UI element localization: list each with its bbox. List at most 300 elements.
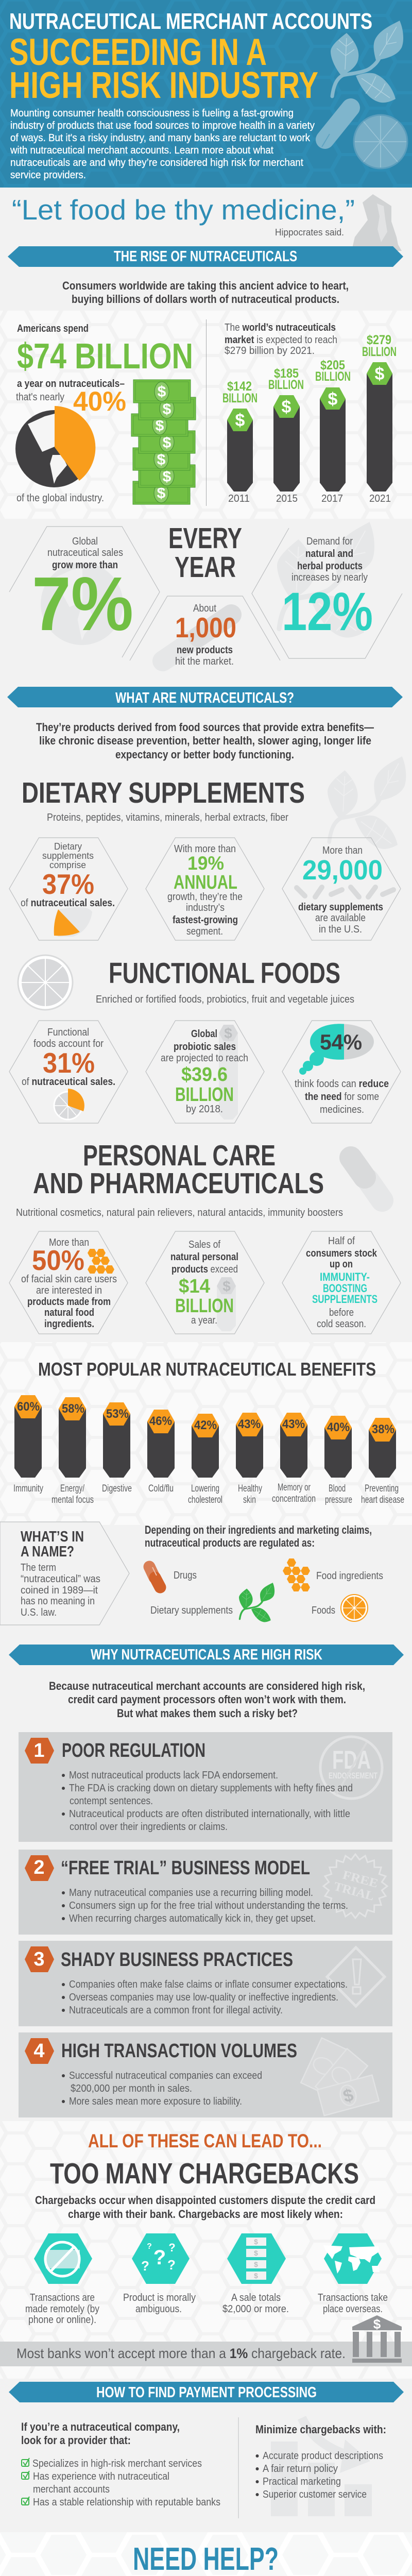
panel: market growth chart	[222, 322, 397, 504]
heading: high transaction volumes: HIGH TRANSACTION VOLUMES	[61, 2040, 297, 2062]
heading: every year: EVERY	[168, 522, 242, 555]
bar chart: benefits: Immunity	[13, 1483, 43, 1494]
label: food ingredients: Food ingredients	[316, 1570, 383, 1582]
stat: demand 12%: increases by nearly	[291, 572, 368, 583]
icon: question marks hexagon: ?	[153, 2246, 166, 2269]
list: free trial bullets: Many nutraceutical companies use a recurring billing model.	[69, 1887, 313, 1899]
bar chart: benefits: 53%	[106, 1407, 129, 1421]
callout: 1% chargeback rate	[0, 2315, 412, 2366]
badge: 2	[25, 1855, 54, 1881]
icon: plant watermark	[277, 522, 374, 638]
list: free trial bullets	[62, 1887, 348, 1924]
card: 31% of sales	[9, 1021, 128, 1123]
badge: 1: 1	[33, 1740, 45, 1761]
card: probiotic sales: are projected to reach	[161, 1053, 248, 1064]
card: 19% annual growth: 19%	[187, 853, 224, 874]
icon: bar watermark: $	[222, 1278, 231, 1294]
icon: pills	[297, 887, 393, 897]
panel: 4 high transaction volumes	[19, 2032, 392, 2117]
icon: honeycomb	[283, 1558, 310, 1591]
card: $14 billion sales: a year.	[191, 1315, 217, 1326]
card: 29,000 supplements	[282, 838, 401, 940]
icon: bank: $	[373, 2316, 381, 2332]
banner: the rise of nutraceuticals: THE RISE OF NUTRACEUTICALS	[114, 248, 297, 265]
bar chart: benefits: pressure	[325, 1495, 352, 1505]
icon: money stack: $	[163, 468, 171, 485]
bar chart: benefits	[13, 1395, 404, 1505]
icon: bank	[352, 2315, 402, 2363]
list: shady practices bullets	[62, 1979, 348, 2016]
card: 19% annual growth	[146, 838, 264, 940]
intro text: Mounting consumer health consciousness is fueling a fast-growing	[10, 108, 294, 119]
icon: money stack: $	[158, 383, 166, 400]
icon: bar watermark	[217, 1277, 236, 1331]
card: probiotic sales: $39.6	[181, 1064, 228, 1086]
labels: chargeback conditions: Product is morally	[123, 2292, 196, 2303]
bar chart: market size: $205	[320, 358, 345, 372]
bar chart: benefits: concentration	[272, 1494, 316, 1504]
bar chart: benefits: skin	[243, 1495, 256, 1505]
list: free trial bullets: When recurring charges automatically kick in, they get upset.	[69, 1913, 316, 1924]
panel: 1 poor regulation	[19, 1732, 392, 1842]
card: 31% of sales: of nutraceutical sales.	[22, 1076, 115, 1088]
text: definition	[36, 721, 374, 761]
icon: bar watermark: $	[224, 1025, 232, 1041]
list: provider checklist: Specializes in high-risk merchant services	[32, 2458, 202, 2469]
icon: thought bubble chart	[299, 1024, 374, 1075]
title	[9, 9, 372, 106]
label: drugs: Drugs	[174, 1570, 197, 1581]
card: immunity-boosting supplements: consumers stock	[306, 1248, 377, 1259]
banner: why nutraceuticals are high risk: WHY NUTRACEUTICALS ARE HIGH RISK	[91, 1647, 322, 1663]
list: minimize chargebacks bullets	[255, 2450, 383, 2500]
subheading: examples: Nutritional cosmetics, natural pain relievers, natural antacids, immunity boosters	[16, 1207, 343, 1218]
bar chart: market size: $142	[227, 379, 252, 394]
subheading: examples: Enriched or fortified foods, probiotics, fruit and vegetable juices	[96, 994, 354, 1005]
stat: demand 12%: Demand for	[306, 536, 353, 547]
list: provider checklist: merchant accounts	[33, 2484, 110, 2495]
card: 29,000 supplements: dietary supplements	[298, 902, 383, 913]
list: minimize chargebacks bullets: A fair return policy	[263, 2463, 338, 2475]
icon: money stack: $	[163, 434, 171, 451]
bar chart: market size: BILLION	[315, 369, 351, 384]
intro: consumers worldwide: buying billions of dollars worth of nutraceutical products.	[72, 293, 339, 306]
intro: consumers worldwide: Consumers worldwide are taking this ancient advice to heart,	[62, 279, 349, 292]
banner: what are nutraceuticals	[7, 687, 403, 707]
badge: 1	[25, 1738, 54, 1764]
bar chart: benefits: 46%	[149, 1414, 172, 1428]
callout: 1% chargeback rate: Most banks won’t accept more than a 1% chargeback rate.	[16, 2346, 346, 2361]
callout: what's in a name: WHAT’S IN	[21, 1529, 84, 1545]
icon: no FDA endorsement: ENDORSEMENT	[329, 1771, 377, 1781]
icon: drug capsule	[149, 1567, 160, 1587]
subheading: examples: Proteins, peptides, vitamins, minerals, herbal extracts, fiber	[47, 812, 288, 823]
panel: look for a provider	[21, 2420, 220, 2508]
icon: orange slice	[354, 115, 407, 168]
card: 50% facial care: natural food	[44, 1307, 94, 1318]
stat: 40%: 40%	[73, 386, 126, 417]
card: 50% facial care: products made from	[27, 1296, 111, 1308]
card: $14 billion sales: $14	[179, 1276, 210, 1297]
list: shady practices bullets: Nutraceuticals are a common front for illegal activity.	[69, 2005, 283, 2016]
heading: shady business practices: SHADY BUSINESS PRACTICES	[61, 1949, 293, 1971]
bar chart: market size: 2015	[276, 493, 298, 504]
label: foods: Foods	[312, 1605, 335, 1616]
labels: chargeback conditions	[25, 2292, 388, 2326]
card: $14 billion sales	[146, 1231, 264, 1334]
card: probiotic sales: probiotic sales	[174, 1041, 236, 1053]
heading: dietary supplements: DIETARY SUPPLEMENTS	[22, 776, 305, 809]
heading: provider	[21, 2420, 180, 2447]
card: 50% facial care	[9, 1231, 128, 1334]
card: immunity-boosting supplements: up on	[330, 1259, 353, 1270]
card: immunity-boosting supplements: BOOSTING	[323, 1282, 367, 1295]
card: 29,000 supplements: More than	[322, 845, 363, 856]
icon: no FDA endorsement	[320, 1737, 382, 1799]
stat: demand 12%	[282, 536, 373, 642]
banner: how to find payment processing	[9, 2382, 404, 2402]
bar chart: benefits: Healthy	[238, 1483, 262, 1494]
icon: bills hexagon	[227, 2233, 286, 2284]
icon: money stack: $	[157, 451, 166, 468]
badge: 4	[25, 2038, 54, 2064]
card: probiotic sales: by 2018.	[186, 1104, 223, 1115]
heading: provider: If you’re a nutraceutical company,	[21, 2420, 180, 2433]
icon: no FDA endorsement: FDA	[332, 1745, 371, 1774]
heading: every year: YEAR	[175, 551, 236, 584]
card: immunity-boosting supplements: before	[329, 1307, 354, 1318]
text: market forecast: market is expected to reach	[225, 334, 337, 346]
icon: capsule watermark	[163, 615, 231, 661]
list: minimize chargebacks bullets: Accurate product descriptions	[263, 2450, 383, 2462]
icon: orange slice	[341, 1595, 368, 1621]
panel: 2 free trial business model	[19, 1850, 392, 1935]
bar chart: market size: 2021	[369, 493, 391, 504]
title: SUCCEEDING IN A	[9, 31, 267, 73]
label: dietary supplements: Dietary supplements	[150, 1605, 233, 1616]
quote: Hippocrates said.	[275, 227, 344, 238]
stat: sales grow 7%: Global	[72, 536, 98, 547]
list: transaction volume bullets: More sales mean more exposure to liability.	[69, 2096, 242, 2107]
icon: free trial starburst: FREE	[341, 1868, 380, 1891]
bar chart: benefits: 58%	[62, 1402, 84, 1416]
list: poor regulation bullets: The FDA is cracking down on dietary supplements with hefty fines and	[69, 1783, 353, 1794]
list: transaction volume bullets: Successful nutraceutical companies can exceed	[69, 2070, 262, 2081]
card: $14 billion sales: products exceed	[171, 1264, 238, 1275]
icon: green plant	[239, 1583, 274, 1622]
list: minimize chargebacks bullets: Superior customer service	[263, 2489, 367, 2500]
card: $14 billion sales: Sales of	[188, 1239, 220, 1250]
card: $14 billion sales: BILLION	[175, 1295, 234, 1317]
bar chart: market size: $185	[274, 366, 299, 381]
stat: demand 12%: 12%	[282, 582, 373, 642]
card: 29,000 supplements: 29,000	[302, 855, 383, 886]
bar chart: market size: $	[235, 411, 245, 430]
card: 37% of sales: Dietary	[54, 841, 82, 852]
bar chart: benefits: Blood	[329, 1483, 346, 1494]
bar chart: benefits: 40%	[327, 1420, 350, 1434]
card: 50% facial care: are interested in	[36, 1285, 102, 1296]
labels: chargeback conditions: phone or online).	[28, 2314, 96, 2326]
icon: capsule watermark	[351, 1158, 382, 1200]
intro text: of ways. But it's a risky industry, and many banks are reluctant to work	[10, 132, 311, 144]
panel: minimize chargebacks	[255, 2418, 386, 2516]
heading: need help: NEED HELP?	[133, 2541, 279, 2576]
text: market forecast: $279 billion by 2021.	[225, 345, 315, 357]
banner: the rise of nutraceuticals	[8, 246, 403, 267]
icon: question marks hexagon	[132, 2233, 190, 2284]
card: 19% annual growth: fastest-growing	[173, 914, 238, 926]
stat: 1,000 new products: hit the market.	[175, 656, 234, 667]
bar chart: market size: BILLION	[268, 378, 304, 392]
bar chart: benefits: Preventing	[365, 1483, 399, 1494]
icon: orange slice watermark	[18, 955, 73, 1010]
bar chart: benefits: Lowering	[191, 1483, 219, 1494]
card: 54% think foods: the need for some	[305, 1091, 379, 1103]
bar chart: market size: $	[328, 389, 338, 409]
card: probiotic sales	[146, 1021, 264, 1123]
banner: what are nutraceuticals: WHAT ARE NUTRACEUTICALS?	[115, 690, 294, 706]
text: market forecast: The world’s nutraceuticals	[225, 322, 336, 333]
text: high risk intro: credit card payment processors often won’t work with them.	[68, 1693, 346, 1706]
stat: 1,000 new products: 1,000	[175, 612, 236, 643]
card: 37% of sales: supplements	[42, 851, 94, 861]
icon: thought bubble chart: 54%	[320, 1030, 362, 1054]
icon: Hippocrates bust	[353, 194, 402, 251]
panel: dietary supplements	[9, 756, 406, 940]
banner: why nutraceuticals are high risk	[9, 1645, 404, 1665]
icon: bills hexagon: $	[254, 2249, 258, 2257]
intro text: industry of products that use food sources to improve health in a variety	[10, 120, 315, 131]
list: minimize chargebacks bullets: Practical marketing	[263, 2476, 341, 2487]
stat: 1,000 new products	[175, 603, 236, 667]
list: provider checklist: Has experience with nutraceutical	[33, 2471, 169, 2482]
card: 31% of sales: Functional	[47, 1027, 89, 1038]
card: $14 billion sales: natural personal	[170, 1251, 238, 1263]
card: 54% think foods: think foods can reduce	[295, 1078, 389, 1090]
icon: warning diamond	[327, 1947, 385, 2006]
icon: question marks hexagon: ?	[141, 2258, 149, 2274]
text: high risk intro: Because nutraceutical merchant accounts are considered high risk,	[49, 1680, 365, 1692]
icon: globe watermark	[41, 563, 123, 645]
icon: money stack: $	[157, 485, 166, 502]
text: regulated intro	[145, 1523, 372, 1549]
card: 29,000 supplements: are available	[315, 912, 366, 924]
heading: personal care and pharmaceuticals	[33, 1139, 324, 1200]
text: americans spend: Americans spend	[17, 323, 89, 334]
card: probiotic sales: BILLION	[175, 1084, 234, 1106]
bar chart: benefits: Cold/flu	[148, 1483, 174, 1494]
heading: all of these can lead to: ALL OF THESE CAN LEAD TO...	[88, 2130, 322, 2151]
card: immunity-boosting supplements	[282, 1231, 401, 1334]
icon: world map hexagon	[323, 2233, 382, 2284]
panel: regulated as	[145, 1523, 383, 1622]
card: 31% of sales: foods account for	[33, 1038, 104, 1049]
bar chart: market size: 2017	[321, 493, 343, 504]
card: 54% think foods	[282, 1021, 401, 1123]
heading: minimize chargebacks: Minimize chargebacks with:	[255, 2423, 386, 2436]
bar chart: benefits: Energy/	[60, 1483, 85, 1494]
text: high risk intro: But what makes them such a risky bet?	[117, 1707, 298, 1720]
bar chart: benefits: 43%	[238, 1417, 261, 1431]
bar chart: benefits: 42%	[194, 1418, 217, 1432]
callout: what's in a name: The term	[21, 1562, 56, 1573]
icon: money stack: $	[163, 401, 171, 418]
bar chart: benefits: 43%	[282, 1417, 305, 1431]
icon: globe pie 40%	[15, 406, 95, 487]
intro text	[10, 108, 315, 181]
bar chart: market size: 2011	[228, 493, 250, 504]
stat: sales grow 7%: 7%	[32, 562, 133, 647]
stat: $74 billion: $74 BILLION	[17, 336, 193, 376]
icon: free trial starburst: TRIAL	[332, 1880, 375, 1904]
stat: sales grow 7%: grow more than	[52, 560, 118, 571]
bar chart: market size: $279	[367, 333, 391, 347]
text: of the global industry: of the global industry.	[16, 493, 104, 504]
intro: consumers worldwide	[62, 279, 349, 306]
labels: chargeback conditions: Transactions take	[318, 2292, 388, 2303]
callout: what's in a name: coined in 1989—it	[21, 1585, 98, 1596]
icon: bills hexagon: $	[254, 2260, 258, 2268]
icon: question marks hexagon: ?	[168, 2241, 176, 2254]
icon: orange pie 31%	[54, 1089, 84, 1120]
card: 29,000 supplements: in the U.S.	[319, 924, 362, 935]
labels: chargeback conditions: made remotely (by	[25, 2303, 99, 2315]
card: 19% annual growth: industry’s	[186, 902, 225, 913]
panel: $74 billion spend	[15, 323, 196, 504]
card: 50% facial care: of facial skin care users	[21, 1274, 117, 1285]
callout: what's in a name: has no meaning in	[21, 1596, 95, 1607]
icon: capsule	[322, 108, 351, 147]
badge: 4: 4	[33, 2040, 45, 2062]
card: 50% facial care: 50%	[32, 1244, 84, 1276]
callout: what's in a name	[0, 1522, 129, 1625]
icon: declining bars watermark	[271, 2418, 372, 2516]
icon: bills hexagon: $	[254, 2238, 258, 2246]
heading: every year	[168, 522, 242, 584]
list: poor regulation bullets: contempt sentences.	[70, 1795, 153, 1807]
card: 50% facial care: More than	[49, 1237, 89, 1248]
heading: personal care and pharmaceuticals: AND PHARMACEUTICALS	[33, 1167, 324, 1200]
list: poor regulation bullets: control over their ingredients or claims.	[70, 1821, 228, 1833]
bar chart: benefits: mental focus	[52, 1495, 94, 1505]
panel: too many chargebacks	[25, 2130, 388, 2326]
icon: bills hexagon: $	[254, 2272, 258, 2280]
card: 19% annual growth: segment.	[186, 926, 223, 937]
icon: no card hexagon	[34, 2233, 92, 2284]
callout: what's in a name: U.S. law.	[21, 1607, 57, 1618]
list: poor regulation bullets: Most nutraceutical products lack FDA endorsement.	[69, 1770, 278, 1781]
text: chargebacks explanation: charge with their bank. Chargebacks are most likely when:	[68, 2208, 343, 2221]
badge: 3	[25, 1946, 54, 1972]
text: high risk intro	[49, 1680, 365, 1720]
quote: “Let food be thy medicine,”	[12, 194, 355, 226]
heading: personal care and pharmaceuticals: PERSONAL CARE	[83, 1139, 276, 1172]
card: 54% think foods: medicines.	[320, 1104, 364, 1115]
icon: question marks hexagon: ?	[147, 2242, 152, 2251]
labels: chargeback conditions: place overseas.	[323, 2303, 383, 2315]
list: poor regulation bullets	[62, 1770, 353, 1833]
bar chart: benefits: cholesterol	[188, 1495, 222, 1505]
text: chargebacks explanation	[35, 2194, 375, 2221]
banner: how to find payment processing: HOW TO FIND PAYMENT PROCESSING	[96, 2384, 317, 2401]
icon: money stack: $	[156, 417, 164, 434]
card: probiotic sales: Global	[191, 1028, 217, 1040]
panel: header	[0, 0, 412, 188]
callout: what's in a name: A NAME?	[21, 1544, 74, 1560]
list: provider checklist	[22, 2458, 220, 2508]
labels: chargeback conditions: A sale totals	[231, 2292, 281, 2303]
list: free trial bullets: Consumers sign up for the free trial without understanding the terms.	[69, 1900, 348, 1911]
bar chart: market size: $	[282, 397, 291, 417]
labels: chargeback conditions: ambiguous.	[135, 2303, 182, 2315]
panel: functional foods	[9, 955, 401, 1123]
text: market forecast	[225, 322, 337, 357]
card: immunity-boosting supplements: cold season.	[317, 1318, 366, 1330]
list: transaction volume bullets	[62, 2070, 262, 2107]
text: that's nearly: that's nearly	[16, 392, 64, 403]
badge: 2: 2	[33, 1857, 45, 1878]
icon: plant watermark	[328, 756, 406, 849]
heading: poor regulation: POOR REGULATION	[62, 1740, 205, 1761]
card: 37% of sales	[9, 838, 128, 940]
card: 19% annual growth: growth, they’re the	[167, 891, 243, 903]
list: shady practices bullets: Companies often make false claims or inflate consumer expectations.	[69, 1979, 348, 1990]
card: 37% of sales: of nutraceutical sales.	[21, 897, 115, 909]
card: immunity-boosting supplements: IMMUNITY-	[320, 1270, 370, 1283]
text: definition: like chronic disease prevention, better health, slower aging, longer life	[39, 734, 371, 747]
intro text: with nutraceutical merchant accounts. Learn more about what	[10, 145, 273, 156]
bar chart: market size: $	[375, 364, 385, 384]
stat: 1,000 new products: new products	[177, 645, 233, 656]
stat: demand 12%: natural and	[305, 548, 353, 560]
badge: 3: 3	[33, 1948, 45, 1970]
bar chart: benefits: 60%	[17, 1400, 40, 1414]
card: 19% annual growth: With more than	[174, 843, 236, 855]
icon: bar watermark	[219, 1025, 238, 1120]
bar chart: benefits: Digestive	[102, 1483, 132, 1494]
text: a year on nutraceuticals: a year on nutraceuticals–	[17, 378, 125, 389]
list: poor regulation bullets: Nutraceutical products are often distributed internationally, with little	[69, 1808, 350, 1820]
heading: functional foods: FUNCTIONAL FOODS	[109, 957, 340, 990]
panel: every year stats	[9, 522, 402, 667]
panel: most popular benefits	[13, 1359, 404, 1505]
list: transaction volume bullets: $200,000 per month in sales.	[71, 2083, 192, 2094]
card: 31% of sales: 31%	[43, 1047, 95, 1079]
icon: honeycomb	[88, 1249, 114, 1274]
panel: 3 shady business practices	[19, 1941, 392, 2026]
bar chart: market size	[222, 333, 397, 504]
intro text: service providers.	[10, 170, 86, 181]
bar chart: benefits: Memory or	[278, 1482, 311, 1493]
intro text: nutraceuticals are and why they’re considered high risk for merchant	[10, 157, 303, 168]
list: provider checklist: Has a stable relationship with reputable banks	[33, 2497, 220, 2508]
callout: what's in a name: “nutraceutical” was	[21, 1573, 100, 1585]
card: 37% of sales: 37%	[42, 868, 94, 900]
card: 19% annual growth: ANNUAL	[174, 872, 237, 893]
icon: money stack	[131, 380, 196, 504]
stat: demand 12%: herbal products	[297, 561, 363, 572]
labels: chargeback conditions: $2,000 or more.	[222, 2303, 289, 2315]
stat: sales grow 7%: nutraceutical sales	[47, 547, 123, 558]
icon: plant	[331, 21, 403, 103]
icon: free trial starburst	[323, 1854, 387, 1918]
labels: chargeback conditions: Transactions are	[30, 2292, 95, 2303]
stat: 1,000 new products: About	[193, 603, 216, 614]
icon: money fan	[301, 2038, 379, 2115]
text: regulated intro: nutraceutical products are regulated as:	[145, 1536, 315, 1549]
title: HIGH RISK INDUSTRY	[9, 65, 318, 106]
